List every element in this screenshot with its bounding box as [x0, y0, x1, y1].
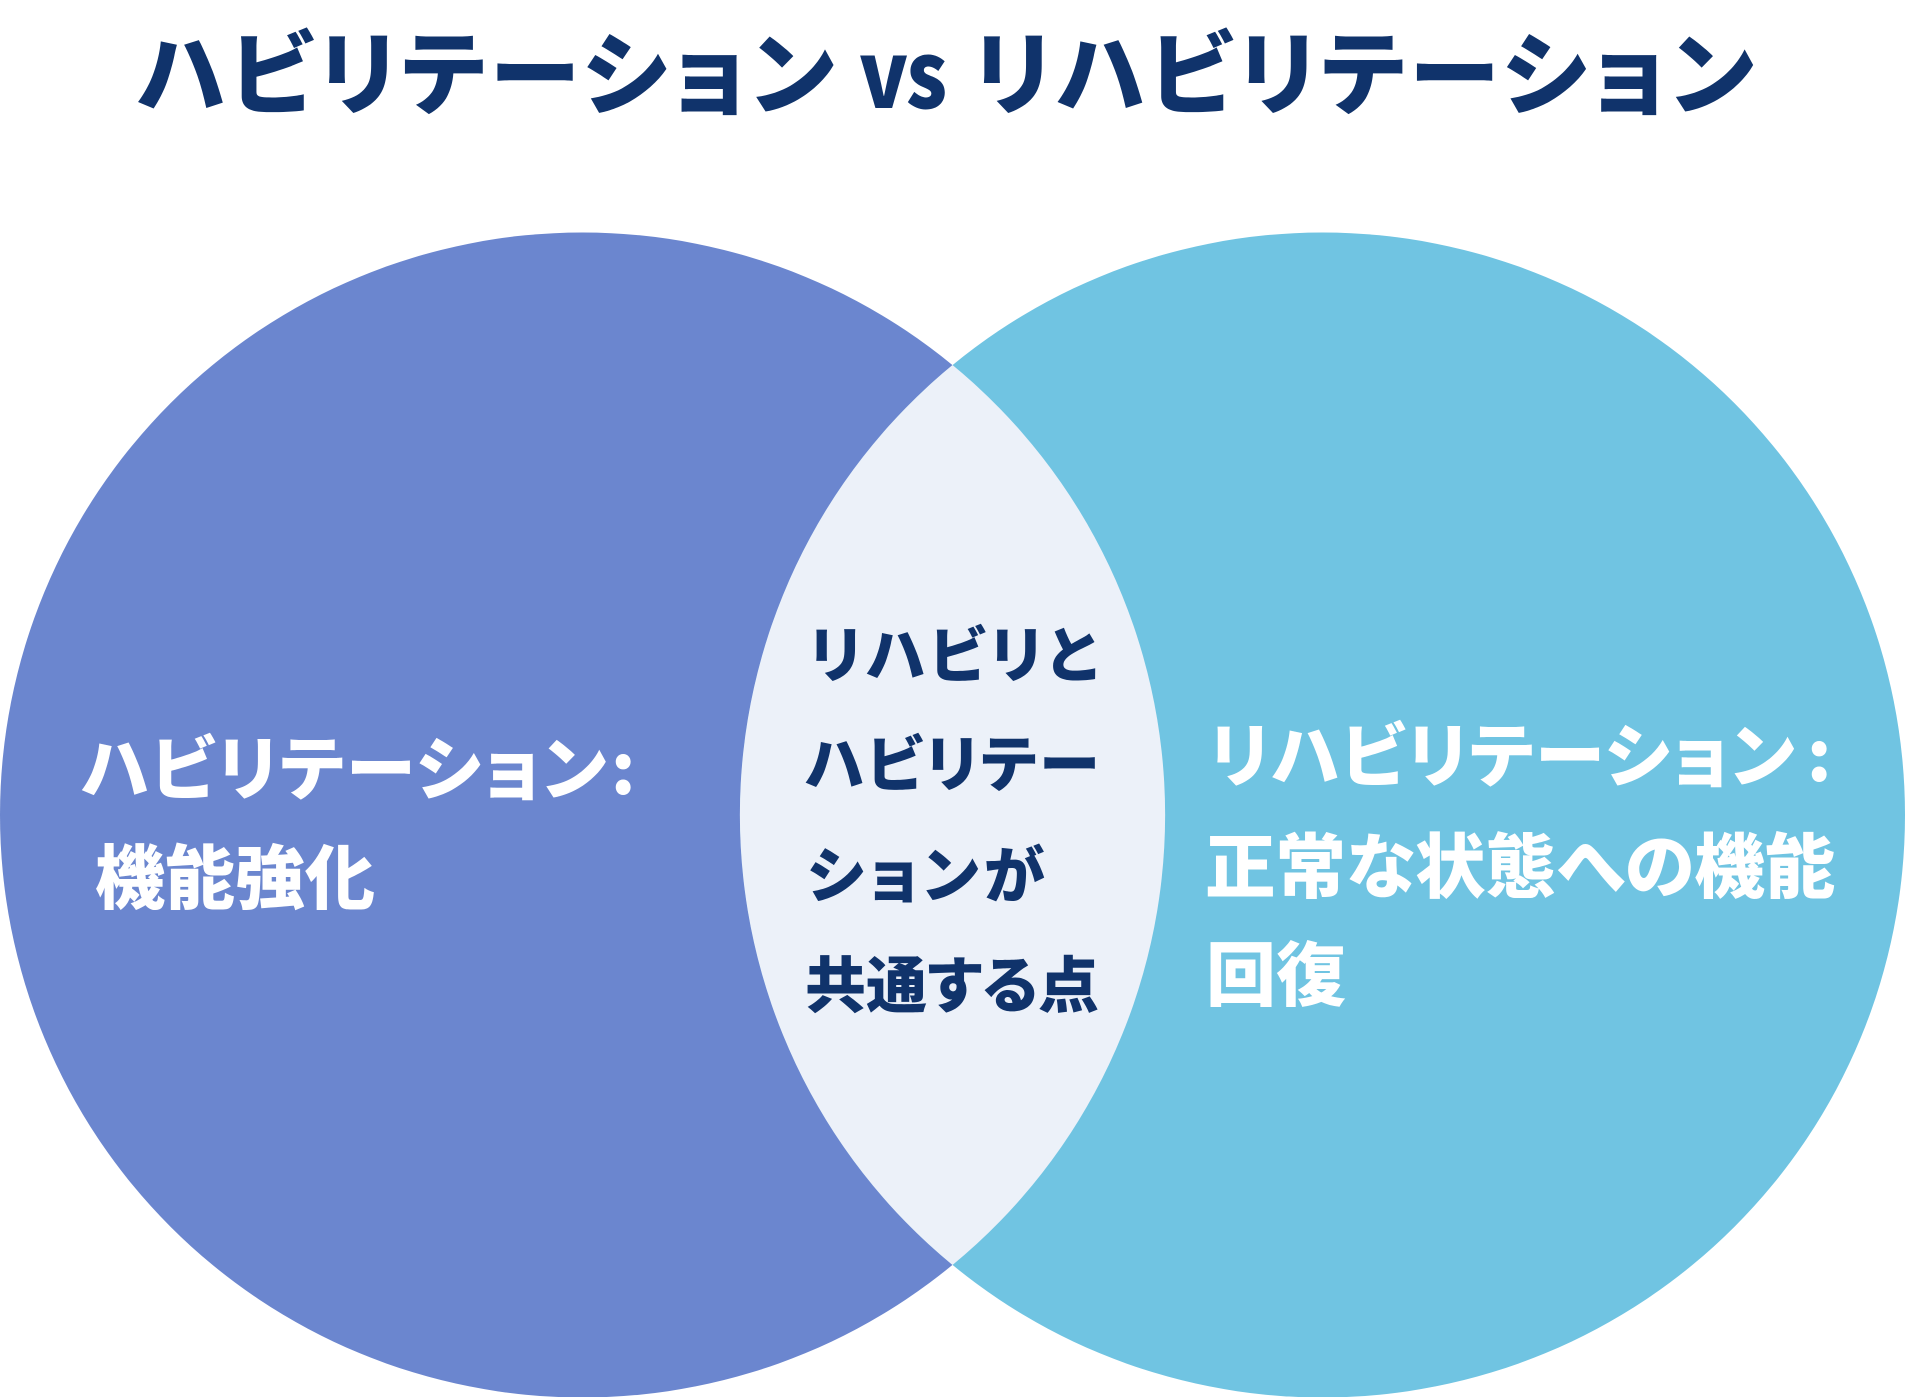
- circle: リハビリテーション: [740, 232, 1905, 1397]
- left label line 2: 機能強化: [95, 823, 375, 924]
- title: left term: ハビリテーション: [137, 2, 840, 134]
- center label line 1: リハビリと: [809, 606, 1102, 695]
- title: vs: vs: [859, 2, 945, 135]
- circle: ハビリテーション: [0, 232, 1165, 1397]
- title: right term: リハビリテーション: [973, 2, 1759, 134]
- overlap area: [740, 365, 1165, 1265]
- right label line 2: 正常な状態への機能: [1205, 811, 1835, 913]
- left label line 1: ハビリテーション:: [81, 714, 638, 815]
- right label line 3: 回復: [1206, 920, 1346, 1021]
- center label line 4: 共通する点: [805, 936, 1099, 1025]
- title: [137, 2, 1759, 135]
- center label line 2: ハビリテー: [805, 715, 1102, 804]
- center label line 3: ションが: [807, 826, 1049, 915]
- center label: [805, 606, 1102, 1025]
- left label: [81, 714, 638, 924]
- right label line 1: リハビリテーション:: [1209, 701, 1834, 802]
- right label: [1205, 701, 1835, 1021]
